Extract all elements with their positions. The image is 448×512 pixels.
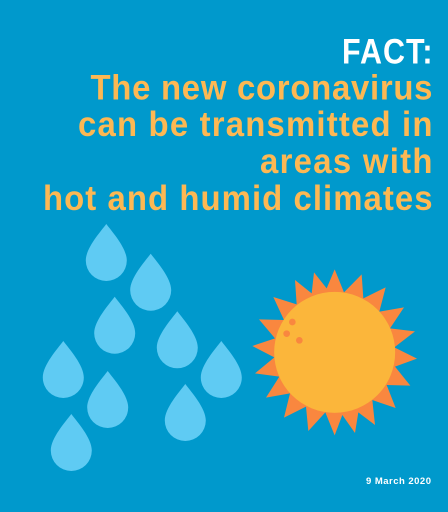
- icon: water drops: [43, 224, 242, 471]
- headline text: can be transmitted in: [78, 105, 432, 144]
- date: 9 March 2020: [366, 476, 431, 487]
- headline text: areas with: [260, 142, 432, 181]
- headline text: hot and humid climates: [43, 179, 433, 218]
- icon: sun: [252, 269, 417, 435]
- title: FACT: FACT:: [342, 31, 432, 71]
- headline text: [43, 69, 433, 218]
- headline text: The new coronavirus: [90, 69, 432, 108]
